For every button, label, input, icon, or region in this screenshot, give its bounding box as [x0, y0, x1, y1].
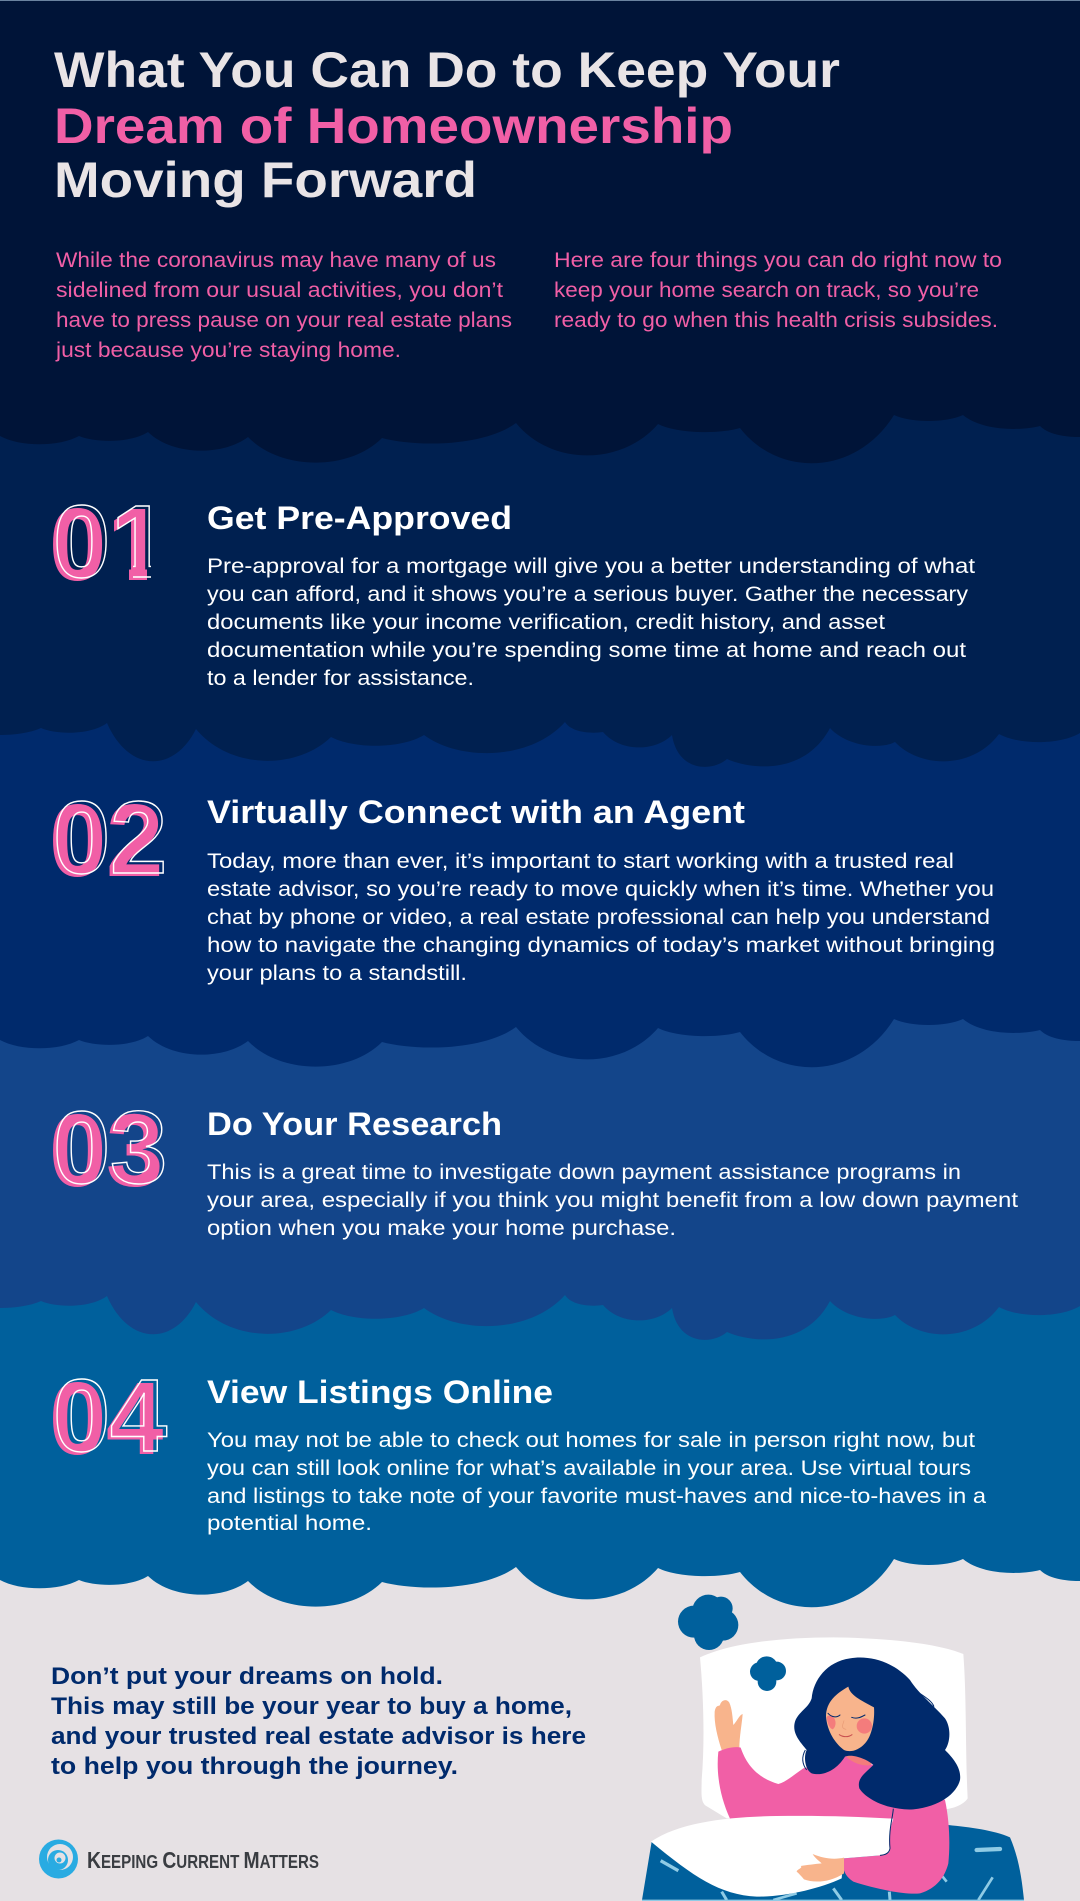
wordmark: KEEPING CURRENT MATTERS [87, 1847, 319, 1873]
hugging hand [797, 1854, 844, 1882]
body text: step 1: documents like your income verification, credit history, and asset [207, 611, 885, 634]
face [826, 1687, 874, 1751]
body text: step 4: You may not be able to check out homes for sale in person right now, but [207, 1429, 975, 1452]
panel: step 1 [53, 504, 975, 685]
sweater [718, 1747, 949, 1894]
title [54, 42, 840, 208]
number 01: 1 [107, 487, 164, 602]
number 01 [53, 504, 151, 581]
band: header background with cloud edge [0, 0, 1080, 463]
cheeks [827, 1716, 872, 1734]
body text: step 2: estate advisor, so you’re ready to move quickly when it’s time. Whether you [207, 878, 994, 901]
number 03: 03 [53, 1090, 167, 1205]
head pillow [700, 1637, 968, 1818]
intro text: right column: Here are four things you can do right now to [554, 249, 1002, 272]
blanket [642, 1825, 1024, 1900]
body text: step 4 [207, 1429, 986, 1535]
intro text: left column: just because you’re staying home. [55, 339, 401, 362]
band: section 3 background with cloud edge [0, 0, 1080, 1340]
icon: small thought cloud [750, 1656, 786, 1691]
facial features [828, 1713, 865, 1737]
body text: step 2: your plans to a standstill. [207, 962, 467, 985]
body text: step 2 [207, 850, 995, 985]
icon: large thought cloud [678, 1595, 738, 1650]
icon: swirl [39, 1840, 78, 1878]
hair [794, 1658, 960, 1809]
number 01: 0 [53, 484, 110, 599]
body text: step 4: and listings to take note of your favorite must-haves and nice-to-haves in a [207, 1485, 986, 1508]
arm outline [880, 1809, 893, 1855]
top edge line [0, 0, 1080, 1]
closing call to action: This may still be your year to buy a home, [51, 1693, 572, 1720]
number 01: 0 [49, 487, 106, 602]
hugged pillow [651, 1816, 893, 1897]
body text: step 3 [207, 1161, 1018, 1240]
body text: step 1: documentation while you’re spending some time at home and reach out [207, 639, 966, 662]
body text: step 3: This is a great time to investigate down payment assistance programs in [207, 1161, 961, 1184]
number 04: 04 [53, 1358, 167, 1473]
panel: step 3 [49, 1090, 1018, 1240]
intro text: right column: keep your home search on track, so you’re [554, 279, 979, 302]
intro text: left column: have to press pause on your real estate plans [56, 309, 512, 332]
body text: step 2: how to navigate the changing dynamics of today’s market without bringing [207, 934, 995, 957]
body text: step 2: Today, more than ever, it’s important to start working with a trusted real [207, 850, 954, 873]
intro text: left column: While the coronavirus may have many of us [56, 249, 496, 272]
number 02: 02 [49, 783, 163, 898]
body text: step 1: to a lender for assistance. [207, 667, 474, 690]
intro text: right column: ready to go when this health crisis subsides. [554, 309, 998, 332]
intro text: left column: sidelined from our usual activities, you don’t [56, 279, 503, 302]
band: section 2 background with cloud edge [0, 0, 1080, 1067]
body text: step 3: your area, especially if you think you might benefit from a low down payment [207, 1189, 1018, 1212]
hair strands [803, 1690, 934, 1770]
blanket stripes [642, 1849, 1024, 1900]
closing call to action: to help you through the journey. [51, 1753, 458, 1780]
title: Moving Forward [54, 152, 477, 208]
body text: step 1 [207, 555, 975, 690]
body text: step 4: potential home. [207, 1512, 372, 1535]
heading: Get Pre-Approved: Get Pre-Approved [207, 500, 512, 536]
body text: step 2: chat by phone or video, a real estate professional can help you understand [207, 906, 990, 929]
panel: step 4 [49, 1358, 986, 1535]
neck [846, 1743, 874, 1765]
closing call to action: Don’t put your dreams on hold. [51, 1663, 443, 1690]
logo: Keeping Current Matters [39, 1840, 319, 1878]
body text: step 3: option when you make your home purchase. [207, 1217, 676, 1240]
intro text: right column [554, 249, 1002, 332]
number 01: 1 [111, 484, 168, 599]
closing call to action [51, 1663, 586, 1780]
body text: step 4: you can still look online for what’s available in your area. Use virtual tours [207, 1457, 971, 1480]
panel: step 2 [49, 780, 995, 985]
title: Dream of Homeownership [54, 98, 733, 154]
number 03: 03 [49, 1093, 163, 1208]
heading: Do Your Research: Do Your Research [207, 1106, 502, 1142]
number 04: 04 [49, 1361, 163, 1476]
band: section 1 background with cloud edge [0, 0, 1080, 767]
heading: Virtually Connect with an Agent: Virtually Connect with an Agent [207, 794, 745, 830]
heading: View Listings Online: View Listings Online [207, 1374, 553, 1410]
raised hand [715, 1700, 743, 1750]
body text: step 1: you can afford, and it shows you’re a serious buyer. Gather the necessary [207, 583, 969, 606]
title: What You Can Do to Keep Your [54, 42, 840, 98]
intro text: left column [55, 249, 512, 362]
illustration: woman sleeping and dreaming [642, 1595, 1024, 1900]
body text: step 1: Pre-approval for a mortgage will give you a better understanding of what [207, 555, 975, 578]
number 02: 02 [53, 780, 167, 895]
closing call to action: and your trusted real estate advisor is here [51, 1723, 586, 1750]
